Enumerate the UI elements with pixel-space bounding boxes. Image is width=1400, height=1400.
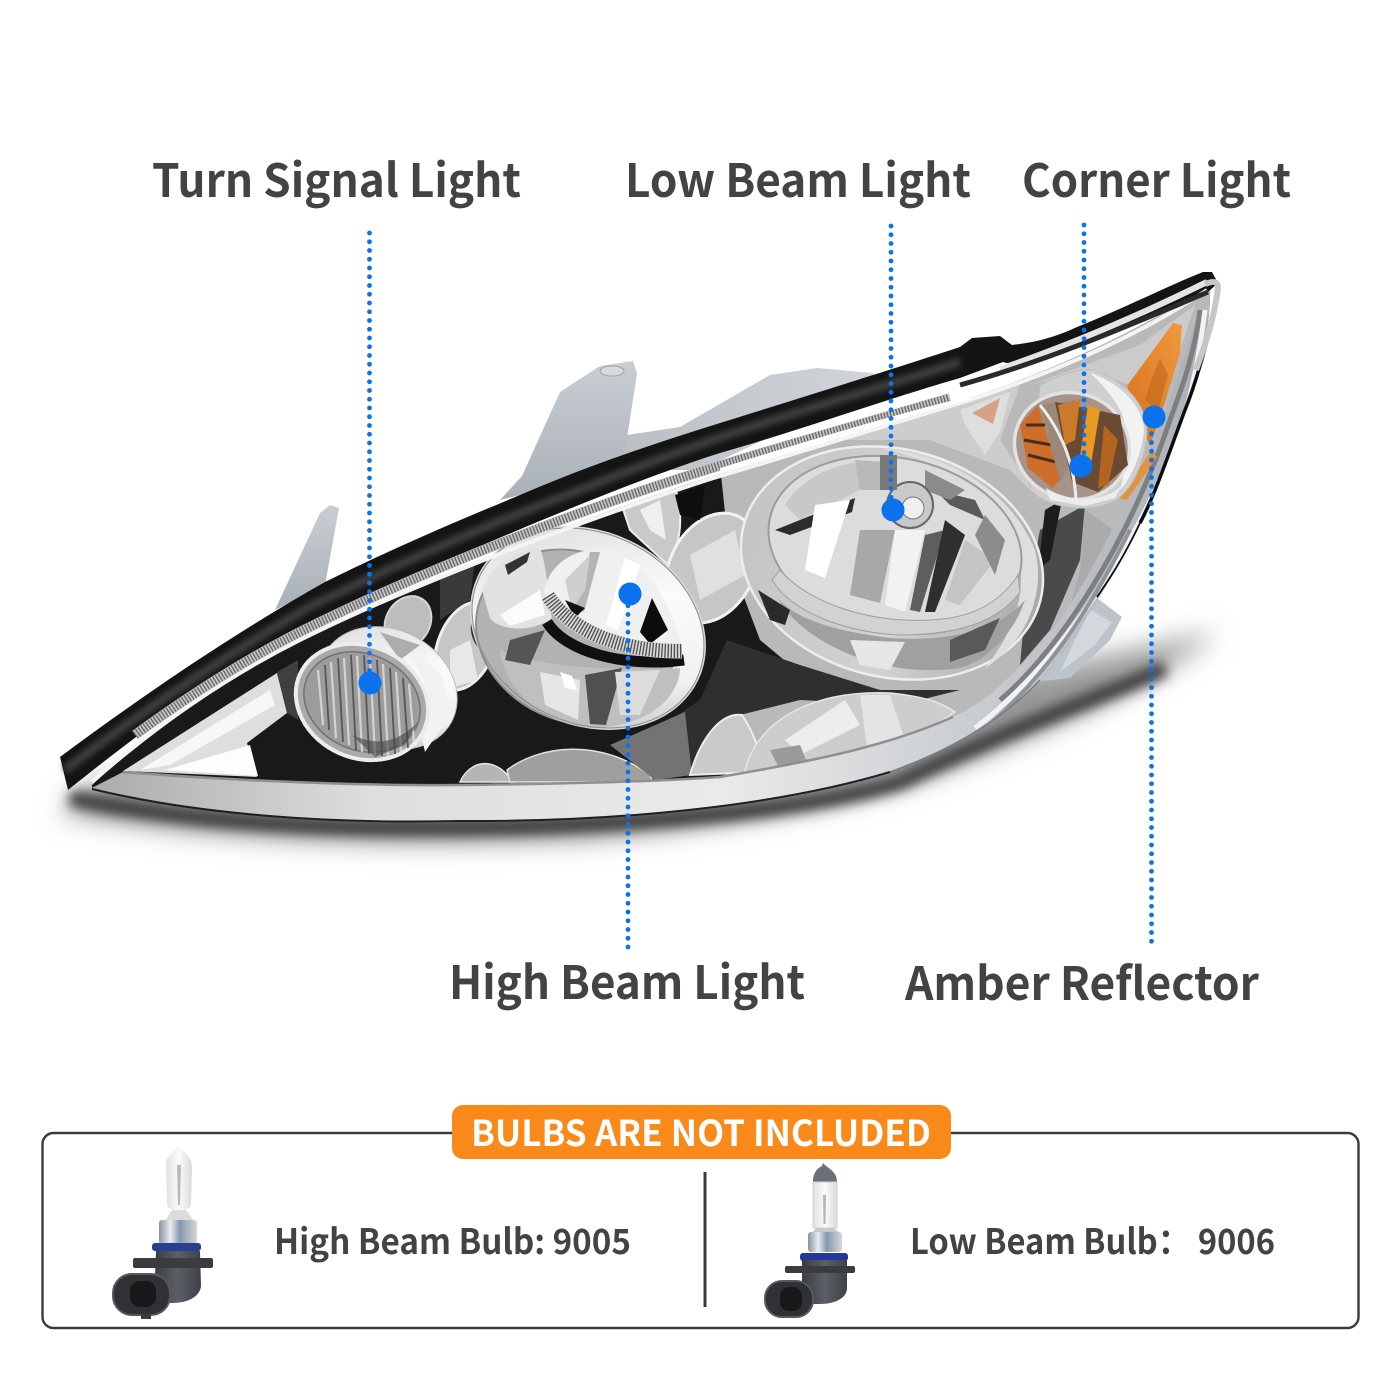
headlight assembly: [58, 272, 1240, 850]
lower reflector: [500, 650, 680, 728]
divider: [704, 1172, 706, 1307]
high beam lamp: [438, 490, 738, 766]
marker dots: [358, 406, 1166, 694]
callout line: low beam: [889, 226, 893, 510]
heading: Amber Reflector: Amber Reflector: [904, 948, 1260, 1014]
heading: Low Beam Light: Low Beam Light: [625, 145, 971, 211]
black arc: [547, 622, 684, 662]
dome: [544, 549, 682, 645]
ground shadow: [58, 632, 1218, 843]
low beam lamp: [716, 415, 1068, 711]
infographic canvas: [41, 160, 1360, 1330]
dark patches right: [1020, 505, 1085, 665]
heading: Turn Signal Light: Turn Signal Light: [152, 145, 521, 211]
bottom lens band: [92, 314, 1209, 822]
icon: 9006 low beam bulb: [765, 1163, 855, 1317]
lower left reflectors: [460, 764, 513, 782]
rim highlight: [439, 491, 737, 765]
heading: High Beam Light: High Beam Light: [449, 947, 805, 1013]
bulb cap: [887, 482, 933, 528]
hatched arc: [548, 596, 682, 651]
lens housing: [84, 285, 1240, 850]
fog / turn signal lamp: [277, 603, 479, 781]
text: high beam bulb: High Beam Bulb: 9005: [274, 1214, 631, 1265]
ribbed arc: [772, 570, 1020, 635]
silver wedge at tip: [123, 673, 287, 777]
panel border: [42, 1133, 1358, 1328]
lower bowl: [778, 598, 1025, 670]
text: low beam bulb: Low Beam Bulb： 9006: [910, 1214, 1275, 1265]
rubber seal: [60, 272, 1218, 790]
top reflector facets: [785, 462, 860, 520]
badge: bulbs are not included: BULBS ARE NOT INCLUDED: [471, 1105, 931, 1157]
callout line: corner: [1082, 225, 1086, 466]
heading: Corner Light: Corner Light: [1022, 145, 1291, 211]
callout line: turn signal: [367, 233, 372, 683]
upper chrome trim with hatching: [92, 282, 1218, 782]
reflector left: [482, 548, 552, 628]
side reflectors: [384, 595, 432, 640]
callout line: high beam: [626, 597, 630, 948]
mounting brackets: [275, 361, 1122, 682]
icon: 9005 high beam bulb: [113, 1145, 213, 1319]
panel: bulbs note: [42, 1105, 1358, 1328]
silver panel right side: [720, 285, 1220, 800]
callout line: amber reflector: [1149, 425, 1154, 950]
dark panel lower middle: [677, 640, 960, 766]
amber reflector: [1117, 323, 1182, 500]
corner light: [1000, 370, 1147, 514]
